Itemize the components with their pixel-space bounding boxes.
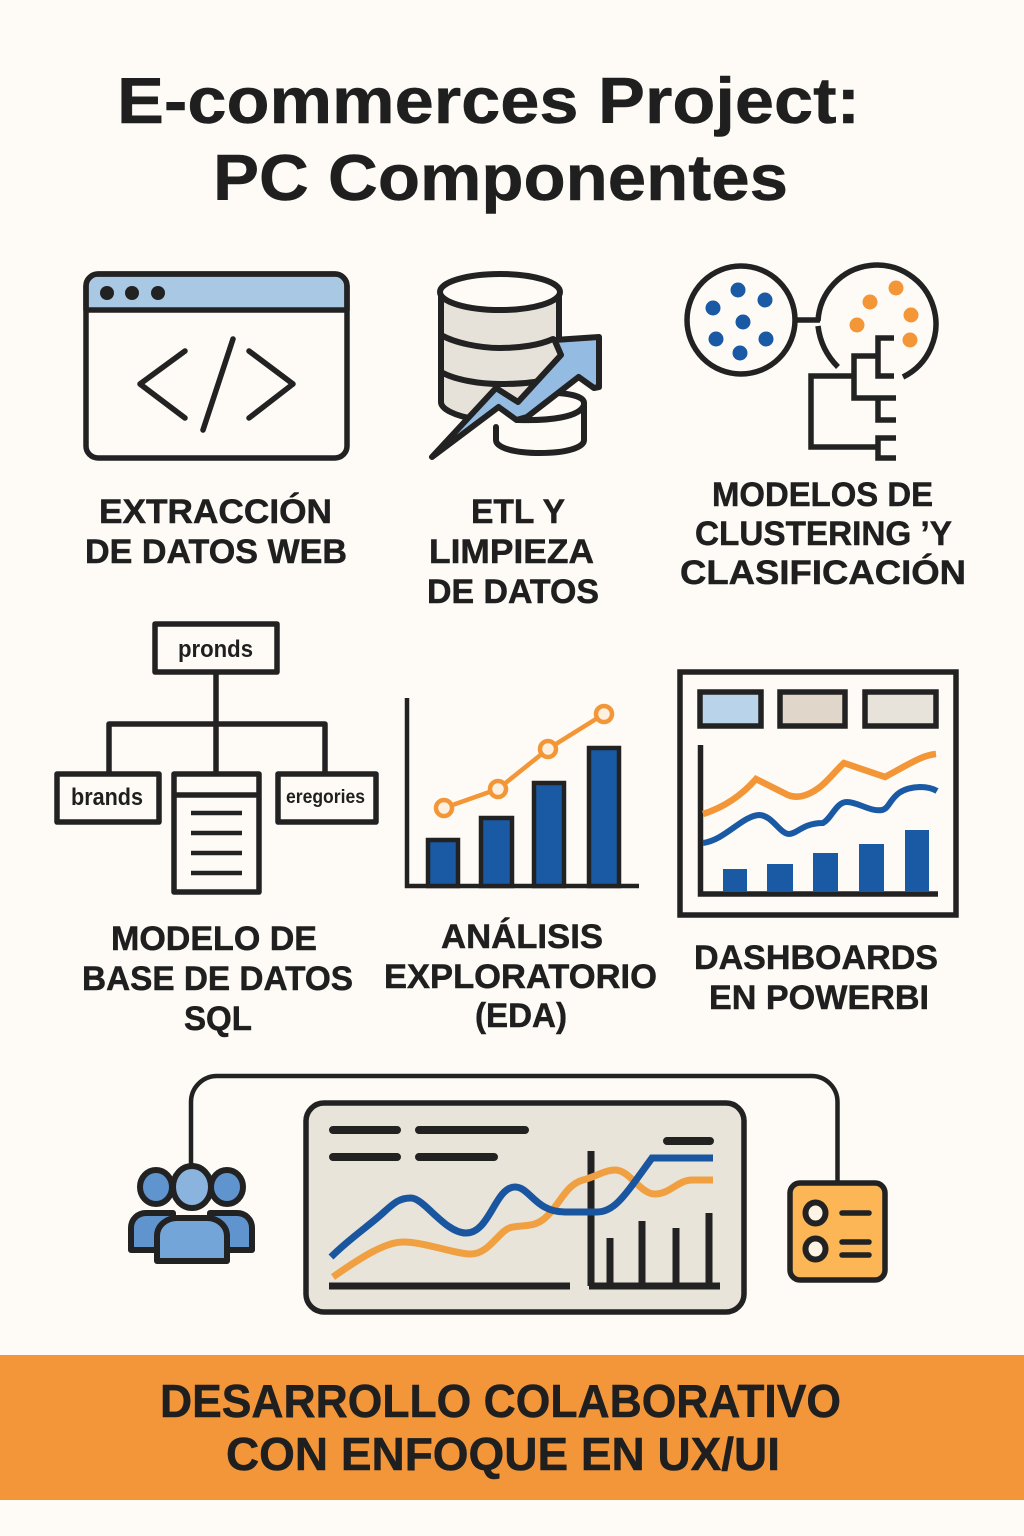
chart: powerbi dashboard: [680, 672, 956, 915]
banner: DESARROLLO COLABORATIVO: [160, 1375, 841, 1427]
label: eda: [384, 918, 657, 1035]
label: etl: LIMPIEZA: [429, 533, 594, 571]
label: clustering: CLASIFICACIÓN: [680, 554, 966, 592]
icon: checklist card: [790, 1183, 885, 1280]
label: dashboards: [694, 939, 938, 1017]
label: etl: [427, 493, 599, 611]
label: eda: (EDA): [475, 997, 567, 1035]
icon: SQL schema: pronds: [178, 636, 253, 663]
icon: SQL schema: [57, 624, 376, 892]
label: extraccion: EXTRACCIÓN: [99, 493, 332, 531]
text placeholder lines: [333, 1130, 710, 1157]
icon: SQL schema: brands: [71, 784, 143, 811]
icon: browser code window: [86, 274, 347, 458]
label: extraccion: DE DATOS WEB: [85, 533, 347, 571]
label: eda: EXPLORATORIO: [384, 958, 657, 996]
icon: SQL schema: eregories: [286, 787, 365, 808]
label: etl: DE DATOS: [427, 573, 599, 611]
blue trend line: [331, 1158, 713, 1257]
chart: EDA bars and line: [407, 698, 639, 886]
title: [117, 64, 860, 214]
panel: central collaborative dashboard: [306, 1103, 744, 1312]
banner: [0, 1355, 1024, 1500]
orange trend line: [333, 1170, 713, 1277]
line chart: [329, 1151, 720, 1286]
label: dashboards: DASHBOARDS: [694, 939, 938, 977]
label: modelo sql: MODELO DE: [111, 920, 317, 958]
label: modelo sql: [82, 920, 353, 1038]
label: dashboards: EN POWERBI: [709, 979, 929, 1017]
label: clustering: MODELOS DE: [712, 476, 933, 514]
label: eda: ANÁLISIS: [441, 918, 603, 956]
connector between users and checklist: [191, 1076, 838, 1184]
icon: clusters and dendrogram: [687, 265, 936, 458]
label: extraccion: [85, 493, 347, 571]
label: clustering: [680, 476, 966, 592]
banner: CON ENFOQUE EN UX/UI: [226, 1428, 780, 1480]
label: modelo sql: SQL: [184, 1000, 252, 1038]
title: E-commerces Project:: [117, 64, 860, 137]
icon: database with arrow: [432, 274, 599, 457]
icon: team of users: [131, 1166, 252, 1261]
title: PC Componentes: [213, 141, 788, 214]
label: clustering: CLUSTERING ’Y: [695, 515, 952, 553]
label: modelo sql: BASE DE DATOS: [82, 960, 353, 998]
label: etl: ETL Y: [471, 493, 565, 531]
